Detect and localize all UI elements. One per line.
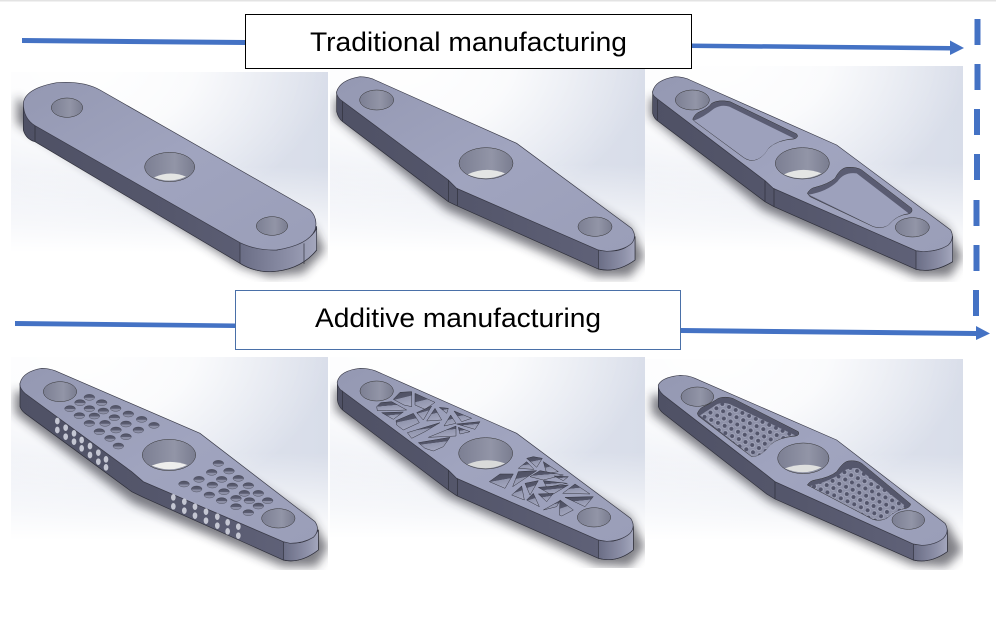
heading: Traditional manufacturing [246, 14, 692, 68]
arrow: traditional manufacturing timeline [22, 38, 964, 55]
panel: bracket with voronoi cutouts [330, 357, 645, 568]
dashed vertical divider [973, 19, 980, 316]
panel: bracket with perforated holes [11, 357, 328, 570]
panel: tapered bracket render [330, 68, 645, 282]
panel: bracket with machined pockets [645, 66, 963, 282]
heading: Additive manufacturing: Additive manufacturing [315, 303, 601, 333]
heading: Traditional manufacturing: Traditional manufacturing [310, 27, 627, 57]
heading: Additive manufacturing [236, 290, 680, 350]
panel: bracket with lattice infill [645, 359, 963, 570]
top edge line [0, 0, 996, 2]
panel: plain rounded bar render [11, 72, 328, 282]
arrow: additive manufacturing timeline [15, 321, 990, 340]
